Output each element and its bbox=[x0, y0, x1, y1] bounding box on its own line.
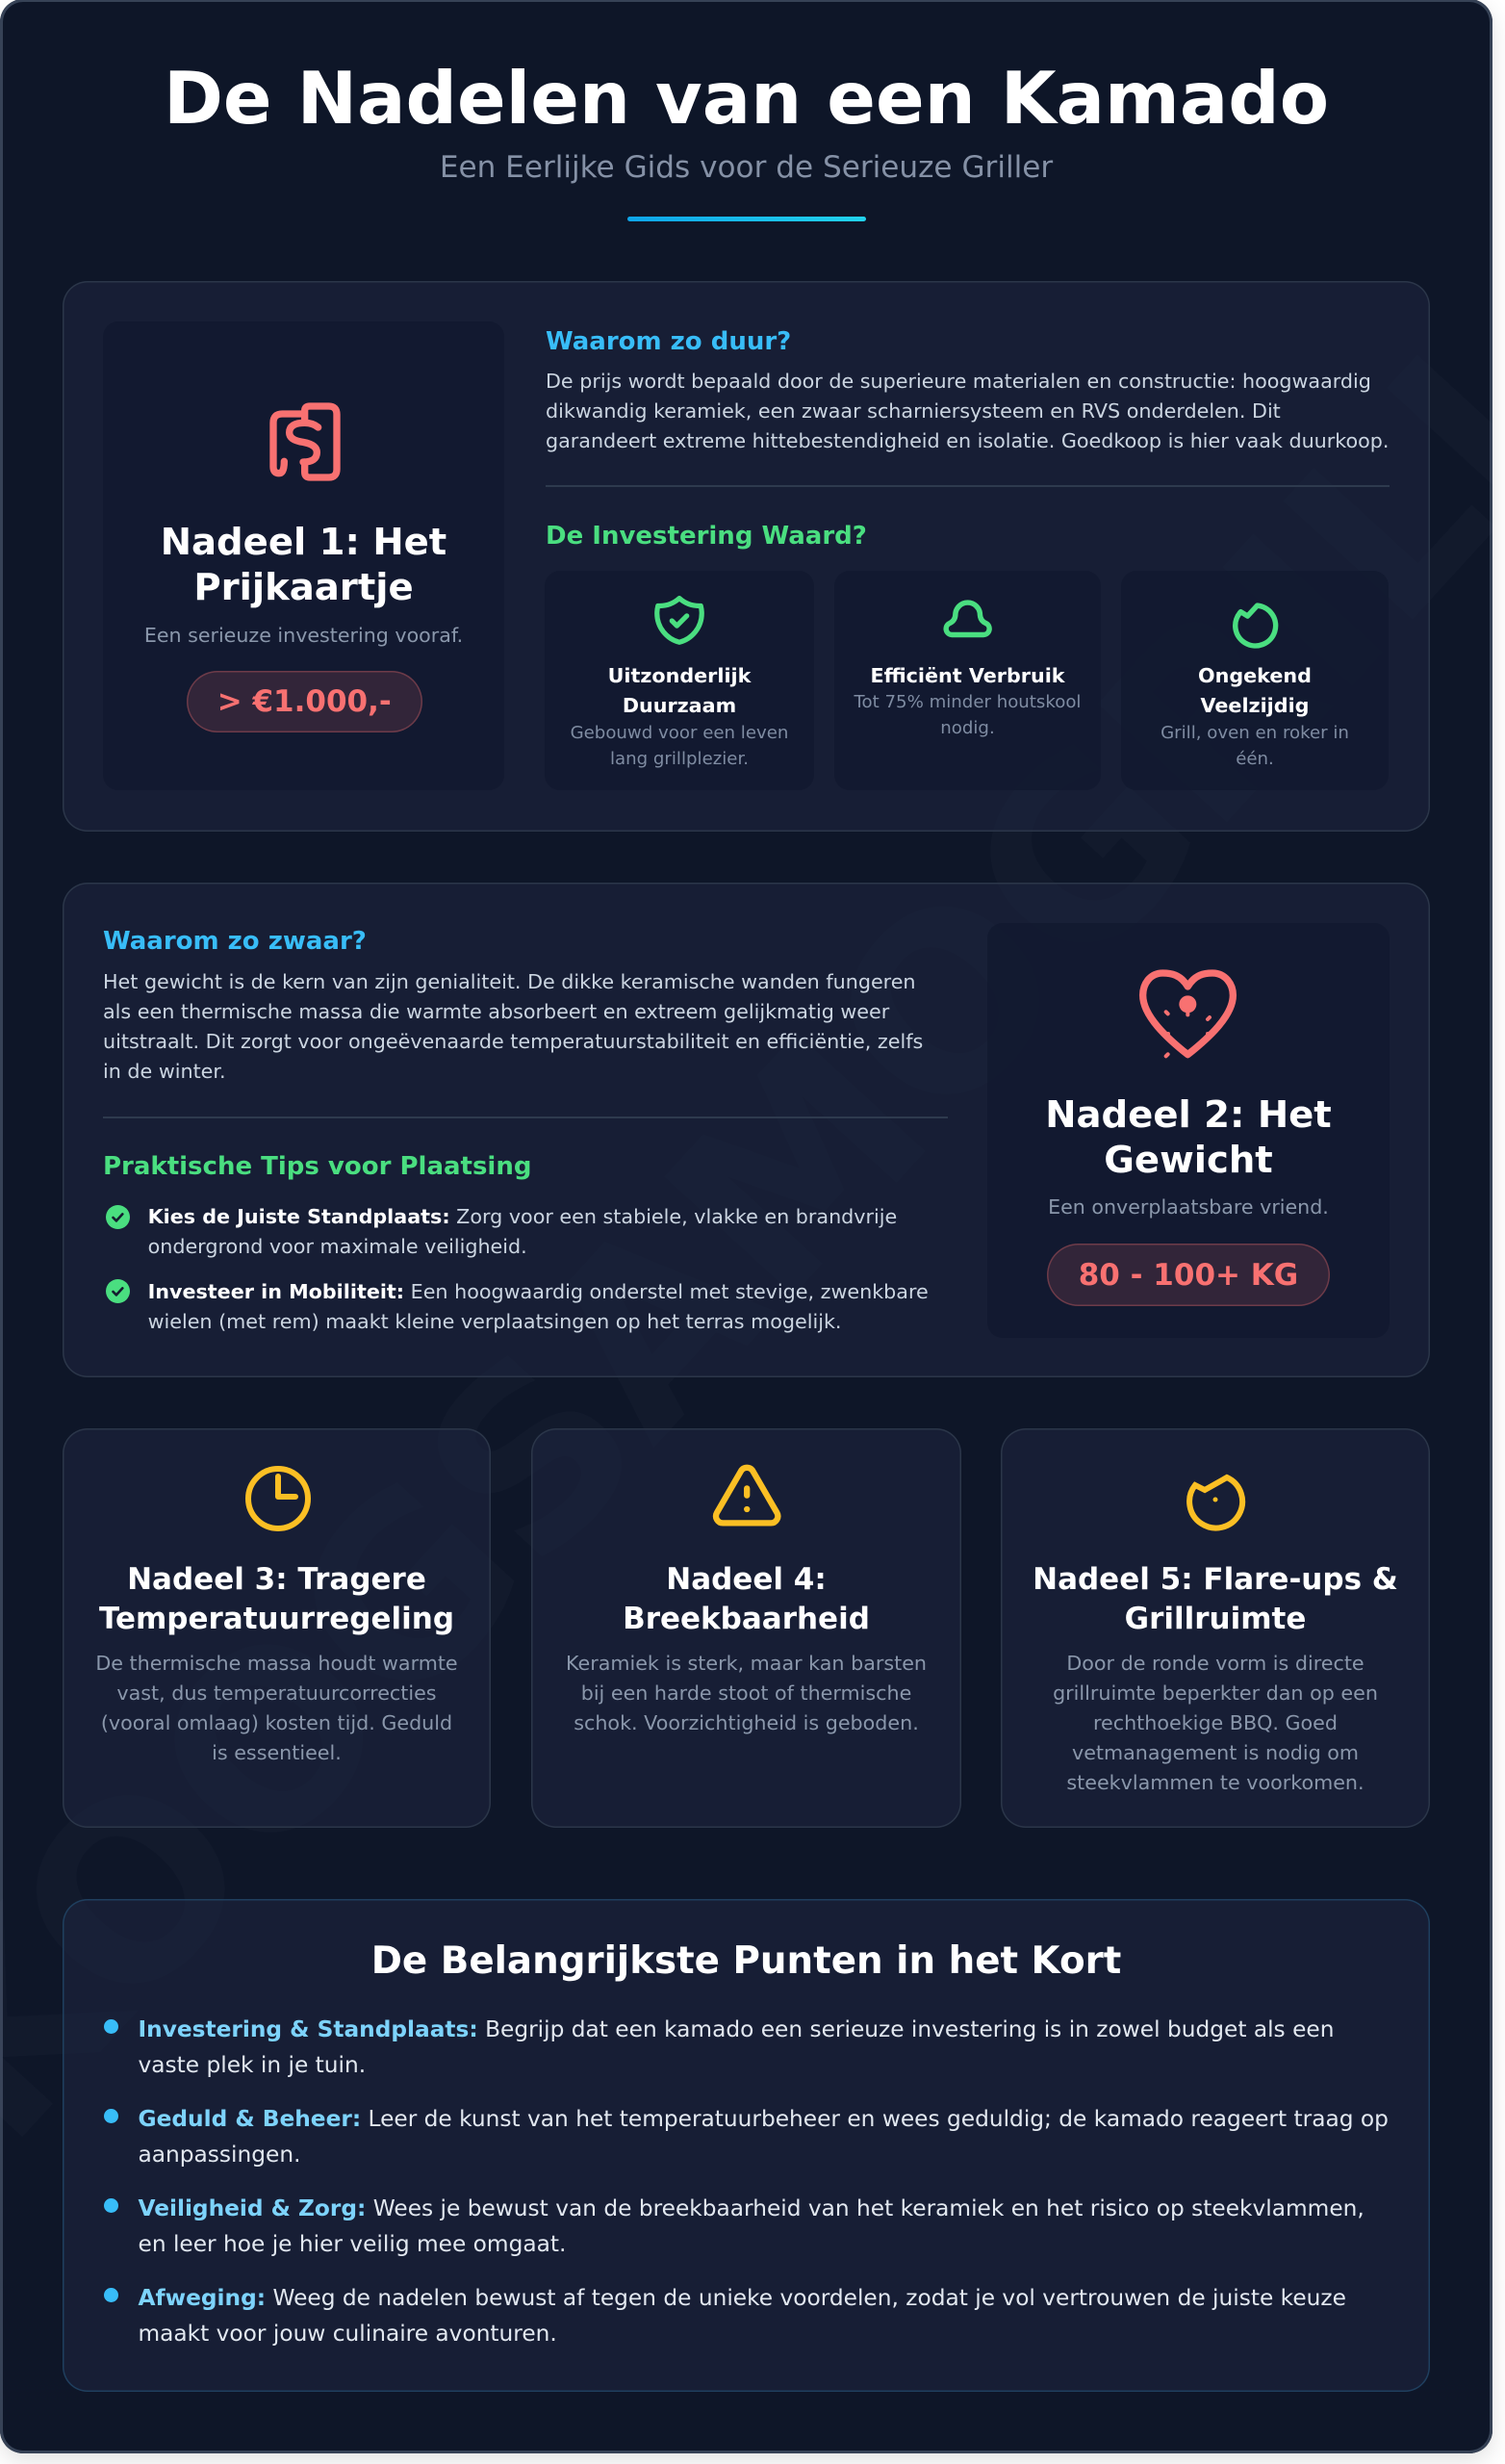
heading: Nadeel 5: Flare-ups & bbox=[1033, 1561, 1398, 1596]
title accent bar bbox=[627, 217, 866, 221]
heading: Nadeel 1: Het bbox=[161, 521, 446, 564]
panel: nadeel 1 prijs bbox=[63, 281, 1430, 832]
heading: Nadeel 3: Tragere bbox=[127, 1561, 426, 1596]
weight pill bbox=[1047, 1244, 1330, 1306]
text: steekvlammen te voorkomen. bbox=[1066, 1771, 1365, 1794]
card text: één. bbox=[1236, 749, 1274, 768]
title: De Nadelen van een Kamado bbox=[164, 57, 1329, 141]
price pill: > €1.000,- bbox=[217, 684, 392, 719]
text: Door de ronde vorm is directe bbox=[1066, 1652, 1365, 1675]
tip 1: ondergrond voor maximale veiligheid. bbox=[148, 1234, 527, 1257]
weight pill: 80 - 100+ KG bbox=[1079, 1257, 1298, 1292]
text bbox=[1053, 1652, 1378, 1794]
card: nadeel 3 bbox=[63, 1428, 491, 1828]
card text: Tot 75% minder houtskool bbox=[855, 692, 1081, 712]
heading bbox=[1045, 1093, 1332, 1182]
text: schok. Voorzichtigheid is geboden. bbox=[574, 1711, 919, 1734]
text block: Het gewicht is de kern van zijn genialiteit. De dikke keramische wanden fungeren bbox=[103, 970, 916, 993]
heading: waarom zo zwaar: Waarom zo zwaar? bbox=[103, 926, 367, 955]
text: (vooral omlaag) kosten tijd. Geduld bbox=[101, 1711, 452, 1734]
point 2 bbox=[139, 2106, 1389, 2168]
caption: Een onverplaatsbare vriend. bbox=[1048, 1195, 1329, 1219]
card: prijskaartje bbox=[103, 321, 504, 790]
card text: nodig. bbox=[940, 718, 995, 737]
text block: uitstraalt. Dit zorgt voor ongeëvenaarde temperatuurstabiliteit en efficiëntie, zelfs bbox=[103, 1030, 923, 1053]
card text bbox=[854, 692, 1081, 737]
card text bbox=[1161, 723, 1349, 768]
heading: waarom zo duur: Waarom zo duur? bbox=[546, 327, 791, 356]
tip 2: Investeer in Mobiliteit: Een hoogwaardig onderstel met stevige, zwenkbare bbox=[148, 1280, 929, 1303]
heading: Nadeel 4: bbox=[666, 1561, 827, 1596]
subtitle: Een Eerlijke Gids voor de Serieuze Griller bbox=[440, 150, 1053, 185]
bullet 4 bbox=[104, 2287, 118, 2302]
icon: flame bbox=[1186, 1475, 1245, 1531]
card text bbox=[571, 723, 788, 768]
icon: check 1 bbox=[106, 1205, 130, 1229]
heading bbox=[1033, 1561, 1398, 1636]
icon: check 2 bbox=[106, 1279, 130, 1303]
text block: in de winter. bbox=[103, 1059, 226, 1082]
card title bbox=[608, 664, 752, 717]
icon: warning bbox=[712, 1465, 781, 1527]
panel: nadeel 2 gewicht bbox=[63, 883, 1430, 1377]
card: gewicht bbox=[987, 923, 1390, 1338]
caption: Een serieuze investering vooraf. bbox=[144, 624, 463, 647]
card text: Grill, oven en roker in bbox=[1161, 723, 1349, 743]
price pill bbox=[187, 671, 422, 732]
card title: Veelzijdig bbox=[1201, 694, 1309, 717]
card: nadeel 5 bbox=[1001, 1428, 1430, 1828]
heading: De Belangrijkste Punten in het Kort bbox=[371, 1939, 1121, 1983]
point 3: Veiligheid & Zorg: Wees je bewust van de breekbaarheid van het keramiek en het risico op steekvlammen, bbox=[139, 2194, 1365, 2221]
icon: cloud bbox=[943, 600, 992, 637]
tip 1: Kies de Juiste Standplaats: Zorg voor een stabiele, vlakke en brandvrije bbox=[148, 1205, 897, 1228]
point 4: maakt voor jouw culinaire avonturen. bbox=[139, 2320, 557, 2347]
text block: als een thermische massa die warmte absorbeert en extreem gelijkmatig weer bbox=[103, 999, 889, 1022]
heading bbox=[623, 1561, 870, 1636]
text block: garandeert extreme hittebestendigheid en isolatie. Goedkoop is hier vaak duurkoop. bbox=[546, 429, 1390, 452]
text: vetmanagement is nodig om bbox=[1072, 1740, 1359, 1763]
bullet 2 bbox=[104, 2108, 118, 2123]
card title: Ongekend bbox=[1198, 664, 1312, 687]
card title: Uitzonderlijk bbox=[608, 664, 751, 687]
point 3: en leer hoe je hier veilig mee omgaat. bbox=[139, 2231, 566, 2256]
heading: Gewicht bbox=[1104, 1138, 1273, 1182]
panel: samenvatting bbox=[63, 1899, 1430, 2392]
text: bij een harde stoot of thermische bbox=[581, 1681, 911, 1704]
heading: tips: Praktische Tips voor Plaatsing bbox=[103, 1151, 531, 1180]
text: vast, dus temperatuurcorrecties bbox=[116, 1681, 437, 1704]
text: is essentieel. bbox=[212, 1740, 342, 1763]
card text: Gebouwd voor een leven bbox=[571, 723, 788, 743]
card: nadeel 4 bbox=[531, 1428, 961, 1828]
card text: lang grillplezier. bbox=[610, 749, 749, 768]
point 4 bbox=[139, 2285, 1346, 2347]
text block bbox=[546, 370, 1390, 452]
point 4: Afweging: Weeg de nadelen bewust af tegen de unieke voordelen, zodat je vol vertrouwen de juiste keuze bbox=[139, 2285, 1346, 2310]
text: De thermische massa houdt warmte bbox=[95, 1652, 458, 1675]
bullet 1 bbox=[104, 2019, 118, 2033]
card title bbox=[1198, 664, 1312, 717]
card title: Efficiënt Verbruik bbox=[870, 664, 1065, 687]
bullet 3 bbox=[104, 2198, 118, 2212]
icon: dollar wallet bbox=[269, 402, 341, 481]
heading bbox=[99, 1561, 454, 1636]
card title: Duurzaam bbox=[623, 694, 736, 717]
tip 2: wielen (met rem) maakt kleine verplaatsingen op het terras mogelijk. bbox=[148, 1309, 841, 1332]
point 1: vaste plek in je tuin. bbox=[139, 2052, 366, 2077]
tip 1 bbox=[148, 1205, 897, 1257]
point 1 bbox=[139, 2015, 1334, 2077]
point 2: Geduld & Beheer: Leer de kunst van het temperatuurbeheer en wees geduldig; de kamado reageert traag op bbox=[139, 2106, 1389, 2131]
heading: Temperatuurregeling bbox=[99, 1602, 454, 1636]
heading: Prijkaartje bbox=[193, 566, 414, 608]
card: duurzaam bbox=[545, 571, 814, 790]
heading: Breekbaarheid bbox=[623, 1602, 870, 1636]
icon: shield bbox=[654, 595, 704, 645]
icon: heart bbox=[1139, 969, 1237, 1059]
text bbox=[566, 1652, 927, 1734]
text block: De prijs wordt bepaald door de superieure materialen en constructie: hoogwaardig bbox=[546, 370, 1371, 393]
heading: Grillruimte bbox=[1125, 1602, 1306, 1636]
text: Keramiek is sterk, maar kan barsten bbox=[566, 1652, 927, 1675]
text block bbox=[103, 970, 923, 1082]
heading bbox=[161, 521, 446, 608]
text block: dikwandig keramiek, een zwaar scharniersysteem en RVS onderdelen. Dit bbox=[546, 399, 1281, 423]
heading: investering: De Investering Waard? bbox=[546, 522, 867, 551]
card: veelzijdig bbox=[1121, 571, 1389, 790]
icon: flame circle bbox=[1233, 603, 1278, 649]
point 1: Investering & Standplaats: Begrijp dat een kamado een serieuze investering is in zowel budget als een bbox=[139, 2015, 1334, 2042]
point 3 bbox=[139, 2194, 1365, 2256]
text: grillruimte beperkter dan op een bbox=[1053, 1681, 1378, 1704]
point 2: aanpassingen. bbox=[139, 2141, 300, 2168]
card: verbruik bbox=[834, 571, 1101, 790]
tip 2 bbox=[148, 1280, 929, 1332]
icon: clock bbox=[245, 1466, 311, 1531]
text: rechthoekige BBQ. Goed bbox=[1093, 1711, 1338, 1734]
text bbox=[95, 1652, 458, 1763]
heading: Nadeel 2: Het bbox=[1045, 1093, 1332, 1137]
